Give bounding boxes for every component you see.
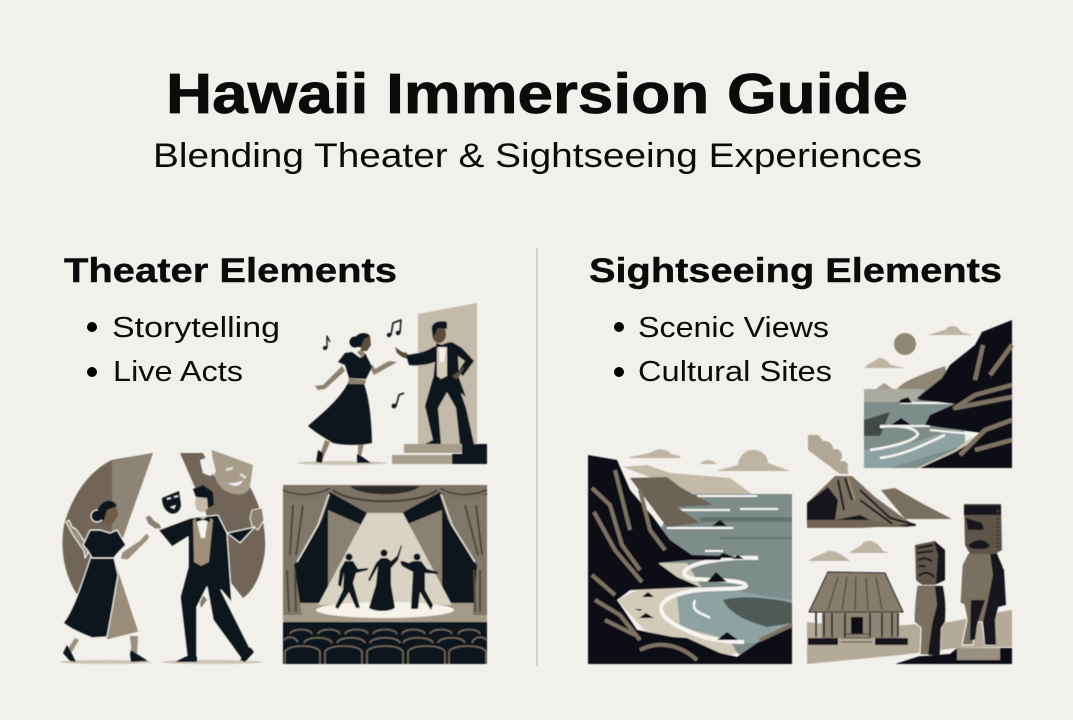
illustration: couple singing on stage steps — [297, 303, 487, 465]
title: Hawaii Immersion Guide — [166, 62, 908, 126]
subtitle: Blending Theater & Sightseeing Experiences — [153, 137, 922, 175]
audience seats — [284, 630, 486, 664]
illustration: volcano — [807, 435, 952, 528]
woman in dress — [308, 333, 397, 463]
tall tiki — [960, 504, 1006, 645]
short tiki — [914, 541, 946, 655]
foam — [661, 558, 758, 642]
list: sightseeing elements — [614, 312, 832, 388]
list: sightseeing elements: Scenic Views — [638, 312, 829, 344]
performers — [335, 545, 438, 611]
illustration: dancing couple with theater masks — [60, 450, 265, 664]
illustration: theater stage with performers — [283, 485, 487, 664]
list: sightseeing elements: Cultural Sites — [638, 356, 832, 388]
tragedy mask — [162, 491, 181, 514]
comedy mask — [200, 450, 253, 494]
heading: sightseeing elements: Sightseeing Elements — [589, 252, 1002, 290]
statue base — [895, 648, 1012, 664]
man dancer — [145, 485, 264, 662]
illustration: large coastline — [588, 449, 792, 664]
illustration: hut and tiki statues — [807, 504, 1012, 664]
dark cliffs — [588, 455, 792, 664]
illustration: small coastline with sun — [864, 320, 1012, 468]
music notes — [323, 320, 404, 408]
clouds — [808, 541, 890, 561]
list: theater elements — [87, 312, 280, 388]
man in tuxedo — [395, 321, 474, 444]
woman dancer — [63, 501, 150, 662]
clouds — [628, 449, 790, 471]
heading: theater elements: Theater Elements — [64, 252, 397, 290]
list: theater elements: Live Acts — [113, 356, 243, 388]
curtains — [283, 485, 487, 615]
hut — [808, 572, 908, 645]
list: theater elements: Storytelling — [112, 312, 280, 344]
rocks — [634, 520, 744, 640]
